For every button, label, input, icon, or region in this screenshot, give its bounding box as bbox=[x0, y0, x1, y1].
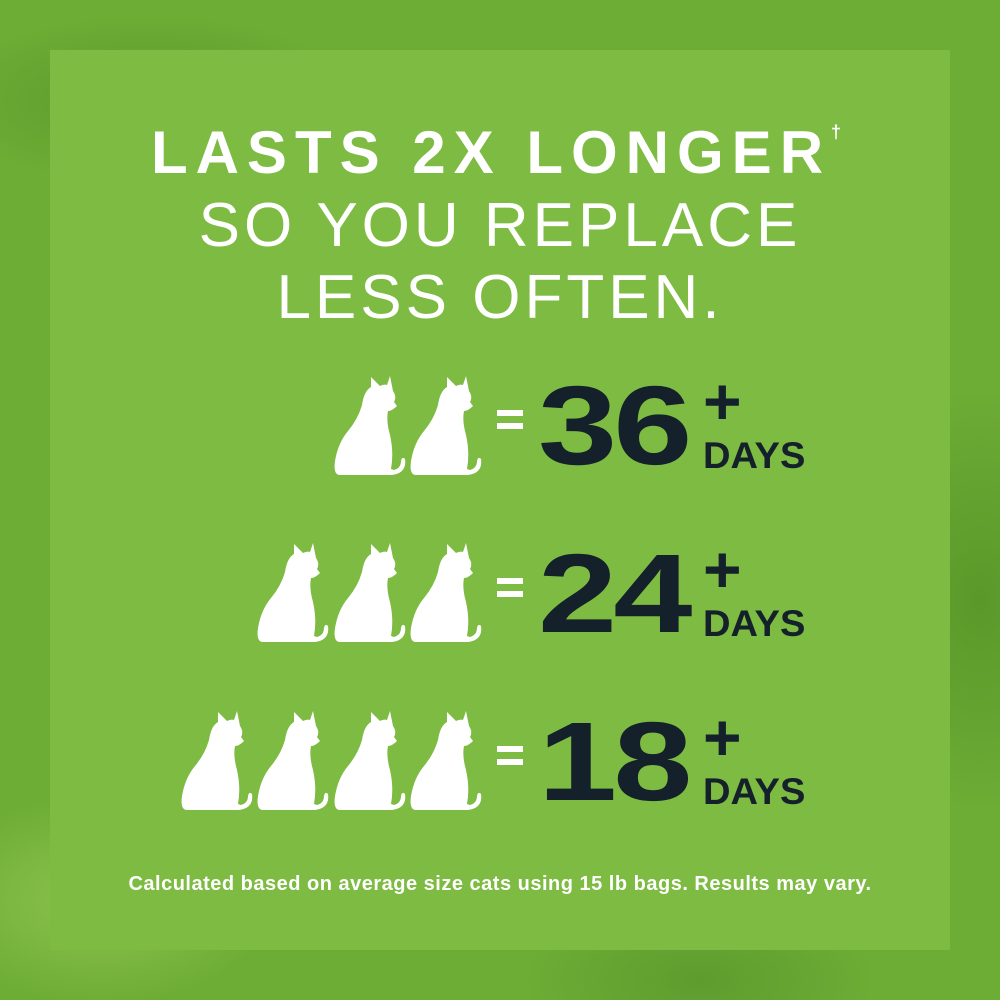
icon: cat bbox=[334, 543, 406, 642]
footnote: Calculated based on average size cats using 15 lb bags. Results may vary. bbox=[128, 873, 872, 895]
icon: cat bbox=[410, 376, 482, 475]
days label: DAYS bbox=[703, 771, 805, 812]
icon: cat bbox=[334, 376, 406, 475]
plus: + bbox=[703, 700, 742, 774]
equals bbox=[497, 746, 523, 766]
plus: + bbox=[703, 532, 742, 606]
number 24: 24 bbox=[538, 531, 689, 656]
days label: DAYS bbox=[703, 603, 805, 644]
subtitle bbox=[199, 191, 801, 332]
icon: cat bbox=[258, 711, 328, 810]
days label: DAYS bbox=[703, 435, 805, 476]
equals bbox=[497, 410, 523, 430]
row: 3 cats 24 days bbox=[258, 543, 482, 642]
icon: cat bbox=[258, 543, 328, 642]
subtitle: LESS OFTEN. bbox=[276, 263, 724, 332]
icon: cat bbox=[410, 711, 482, 810]
icon: cat bbox=[410, 543, 482, 642]
subtitle: SO YOU REPLACE bbox=[199, 191, 801, 260]
icon: cat bbox=[334, 711, 406, 810]
plus: + bbox=[703, 364, 742, 438]
title: LASTS 2X LONGER† bbox=[151, 119, 841, 186]
row: 2 cats 36 days bbox=[334, 376, 482, 475]
row: 4 cats 18 days bbox=[182, 711, 482, 810]
number 18: 18 bbox=[538, 699, 689, 824]
equals bbox=[497, 578, 523, 598]
icon: cat bbox=[182, 711, 252, 810]
number 36: 36 bbox=[538, 363, 689, 488]
